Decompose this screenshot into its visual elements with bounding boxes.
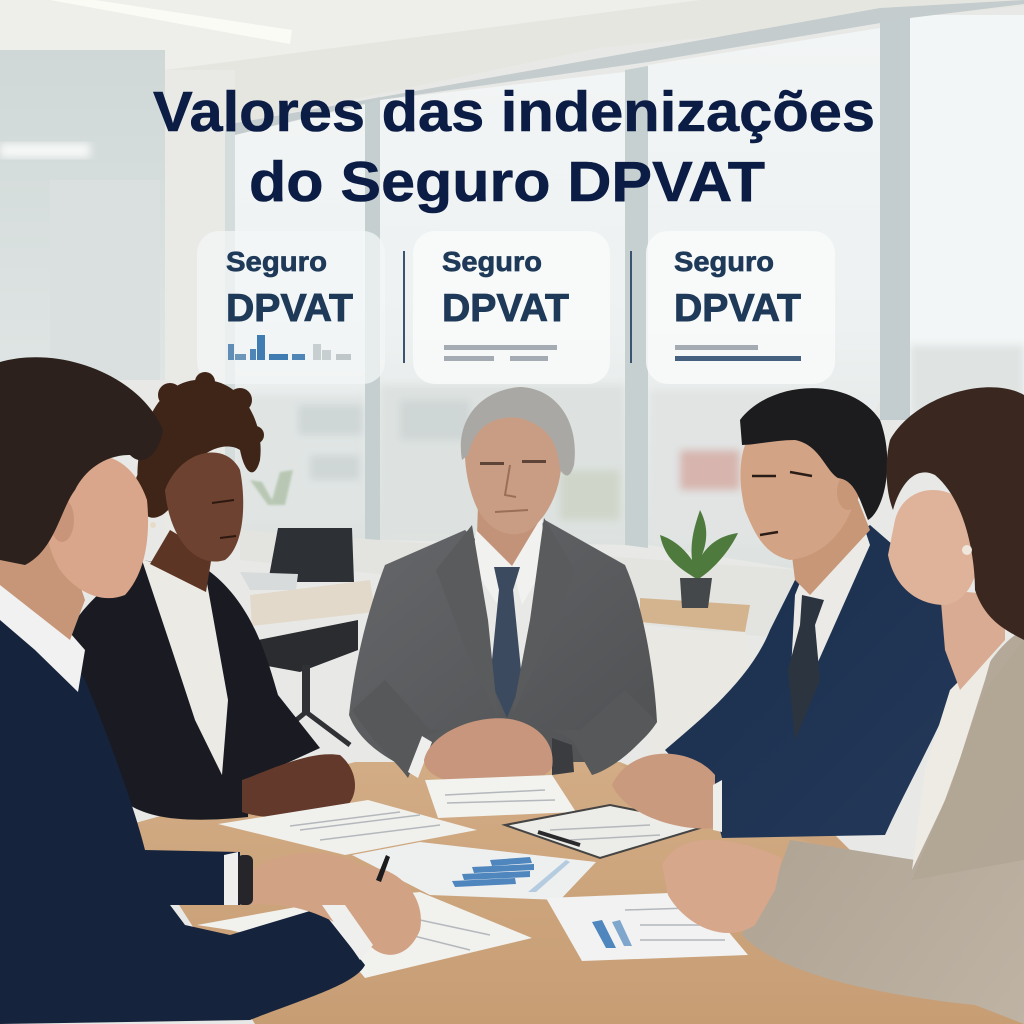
tie <box>788 595 824 740</box>
back wall counter and plant <box>240 470 800 780</box>
papers on table <box>197 775 748 978</box>
hand and pen <box>248 853 421 955</box>
face <box>45 455 148 598</box>
hands <box>242 754 355 818</box>
hair curls <box>136 372 264 489</box>
hands <box>662 840 782 933</box>
cuff <box>713 780 722 832</box>
chart bars <box>452 857 534 887</box>
person: woman with dark suit <box>68 372 355 820</box>
hair <box>740 388 887 520</box>
nose and mouth <box>495 465 528 512</box>
title: do Seguro DPVAT <box>249 150 765 214</box>
person: right man <box>612 388 971 838</box>
shirt <box>474 530 545 690</box>
neck <box>790 500 870 595</box>
jacket <box>68 560 320 820</box>
earring <box>150 522 156 528</box>
collar <box>472 530 512 604</box>
chart paper <box>352 842 596 900</box>
windows with city view <box>225 0 1024 570</box>
blazer <box>742 630 1024 1024</box>
hands <box>612 754 715 829</box>
afro hair <box>137 380 261 518</box>
watch <box>237 855 253 905</box>
neck <box>0 525 85 640</box>
title: Valores das indenizações <box>153 80 875 144</box>
card 1: Seguro <box>226 246 327 277</box>
suit <box>0 595 365 1024</box>
card 2: DPVAT <box>442 287 569 330</box>
shirt <box>142 560 228 775</box>
divider 1 <box>403 251 405 363</box>
earring <box>962 545 972 555</box>
suit <box>349 520 657 778</box>
hair <box>887 387 1024 640</box>
card 2: Seguro <box>442 246 542 277</box>
clip <box>538 832 580 845</box>
title <box>153 80 875 214</box>
hair <box>461 387 575 475</box>
card 1 <box>197 231 385 384</box>
center man forearms and hands <box>352 680 657 787</box>
eyes <box>212 500 236 538</box>
paper front right <box>546 892 748 961</box>
lapels <box>436 525 498 718</box>
eyes <box>480 462 504 465</box>
shirt <box>790 530 870 690</box>
card 2 <box>413 231 610 384</box>
background desk and chair <box>240 528 375 745</box>
mini bar chart <box>228 335 351 360</box>
face <box>465 411 562 534</box>
shirt <box>0 578 85 692</box>
ceiling light <box>50 0 292 44</box>
hair <box>0 357 163 565</box>
face <box>740 429 858 560</box>
paper back center <box>425 775 576 818</box>
suit <box>665 525 971 838</box>
neck <box>150 530 212 592</box>
ear <box>50 498 74 542</box>
card 3: Seguro <box>674 246 774 277</box>
ear <box>837 474 859 510</box>
clipboard paper <box>505 805 710 858</box>
table <box>128 762 1024 1024</box>
cuffs <box>224 852 238 905</box>
tie <box>490 567 522 718</box>
divider 2 <box>630 251 632 363</box>
person: center older man <box>349 387 657 778</box>
face <box>888 490 979 605</box>
neck <box>477 505 542 566</box>
face <box>165 453 243 562</box>
card 3 <box>646 231 835 384</box>
person: left foreground man <box>0 357 421 1024</box>
paper front left <box>197 892 532 978</box>
card 3: DPVAT <box>674 287 801 330</box>
paper back left <box>218 800 477 855</box>
person: right foreground woman <box>662 387 1024 1024</box>
neck <box>940 590 1005 690</box>
card 1: DPVAT <box>226 287 353 330</box>
eyes <box>752 472 812 535</box>
